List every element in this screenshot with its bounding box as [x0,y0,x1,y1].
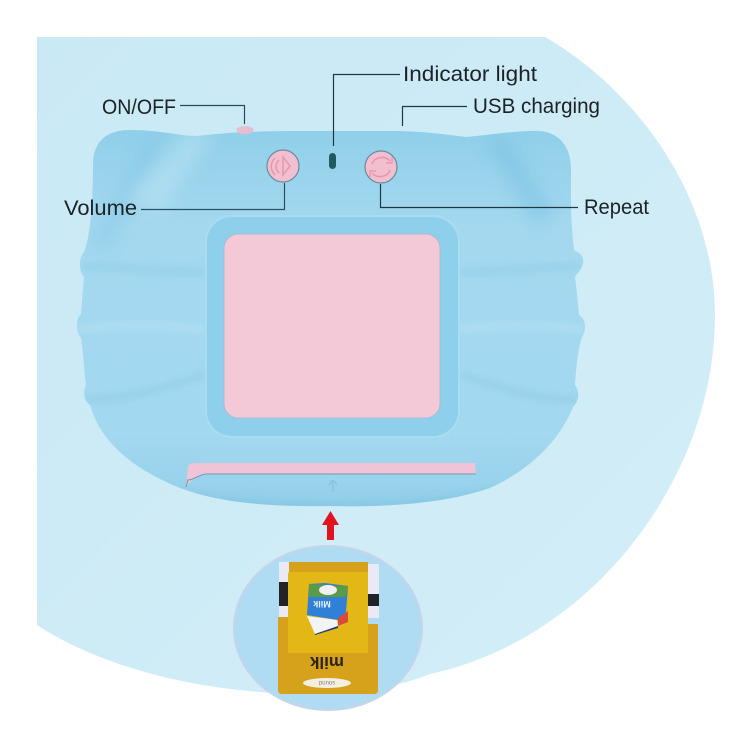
device body [77,130,585,510]
callout: Volume [64,183,284,220]
callout: Volume: Volume [64,197,137,220]
pink screen [224,234,440,418]
background blob [37,37,715,695]
power button [236,126,254,134]
indicator light [329,153,336,169]
callout: USB charging: USB charging [473,95,600,118]
callout: Indicator light: Indicator light [403,63,537,86]
callout: ON/OFF [102,96,244,124]
red arrow [322,511,339,540]
repeat button [365,151,397,183]
card circle [234,546,422,710]
screen frame [206,216,459,437]
callout: Indicator light [334,63,537,146]
callout: Repeat: Repeat [584,196,649,219]
callout: ON/OFF: ON/OFF [102,96,176,119]
callout: Repeat [380,184,649,219]
card word: milk [309,653,344,672]
volume button [267,150,299,182]
flash card [278,562,379,694]
word pill: sound [319,679,335,685]
card slot [186,463,476,492]
callout: USB charging [402,95,600,126]
milk carton picture: Milk [312,599,331,609]
